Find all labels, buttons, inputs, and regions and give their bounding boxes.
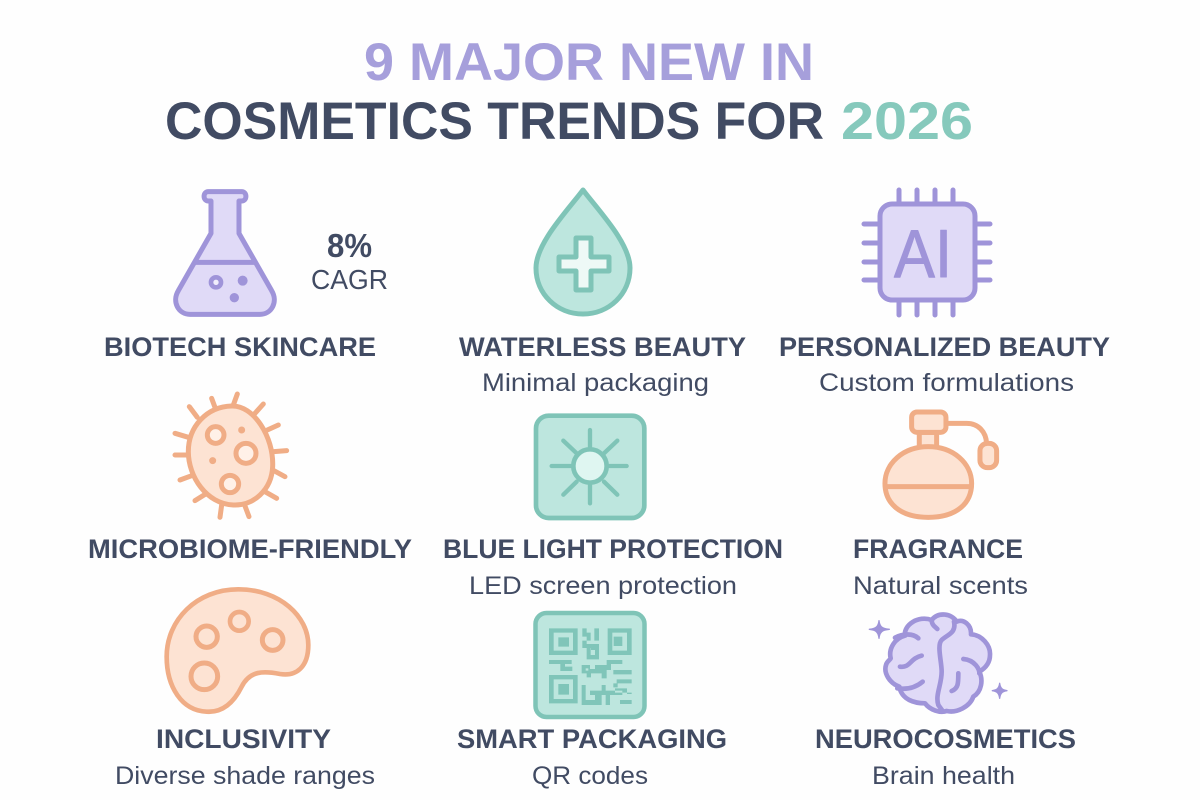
label: PERSONALIZED BEAUTY — [779, 332, 1110, 362]
subtitle: QR codes — [532, 762, 648, 790]
icon: flask — [176, 192, 274, 314]
icon: brain with sparkles — [869, 615, 1007, 712]
panel: neurocosmetics — [815, 615, 1076, 790]
label: WATERLESS BEAUTY — [459, 332, 746, 362]
title: 2026 — [841, 92, 973, 151]
icon: palette — [167, 589, 308, 712]
panel: blue light protection — [443, 416, 783, 600]
panel: personalized beauty — [779, 190, 1110, 397]
stat: 8% CAGR — [311, 227, 388, 295]
label: FRAGRANCE — [853, 534, 1023, 564]
panel: inclusivity — [115, 589, 375, 790]
stat: 8% CAGR: CAGR — [311, 264, 388, 295]
title: 9 MAJOR NEW IN — [364, 33, 814, 92]
panel: fragrance — [853, 412, 1028, 600]
label: BIOTECH SKINCARE — [104, 332, 376, 362]
stat: 8% CAGR: 8% — [327, 227, 372, 264]
subtitle: LED screen protection — [469, 572, 737, 600]
icon: sun in square — [536, 416, 644, 518]
label: INCLUSIVITY — [156, 724, 331, 754]
icon: perfume bottle — [885, 412, 997, 517]
subtitle: Custom formulations — [819, 369, 1074, 397]
panel: biotech skincare — [104, 192, 388, 362]
panel: waterless beauty — [459, 190, 746, 397]
panel: microbiome-friendly — [88, 394, 412, 564]
title: COSMETICS TRENDS FOR — [165, 92, 824, 151]
icon: AI chip — [864, 190, 990, 315]
label: SMART PACKAGING — [457, 724, 727, 754]
label: MICROBIOME-FRIENDLY — [88, 534, 412, 564]
subtitle: Natural scents — [853, 572, 1028, 600]
icon: AI chip: AI — [894, 216, 952, 292]
panel: smart packaging — [457, 613, 727, 790]
subtitle: Brain health — [872, 762, 1015, 790]
icon: water drop with cross — [536, 190, 630, 314]
icon: microbe — [175, 394, 287, 517]
subtitle: Diverse shade ranges — [115, 762, 375, 790]
label: BLUE LIGHT PROTECTION — [443, 534, 783, 564]
label: NEUROCOSMETICS — [815, 724, 1076, 754]
subtitle: Minimal packaging — [482, 369, 709, 397]
title — [165, 33, 973, 151]
icon: QR code — [536, 613, 644, 717]
